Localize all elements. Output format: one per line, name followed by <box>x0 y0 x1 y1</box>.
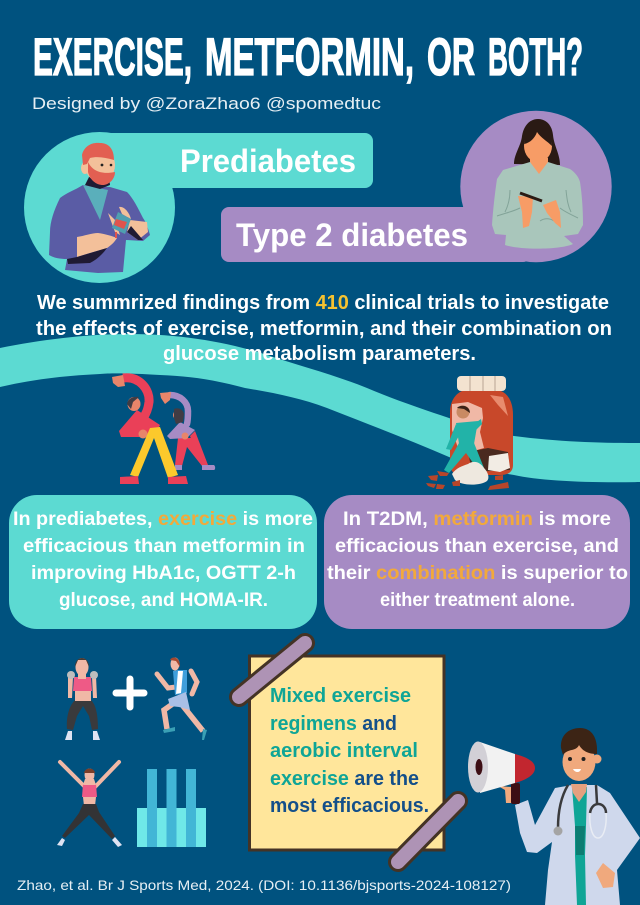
sticky note text: aerobic interval <box>270 740 418 762</box>
title: OR <box>427 28 475 87</box>
credit line: Designed by @ZoraZhao6 @spomedtuc <box>32 94 382 113</box>
panel: prediabetes finding: improving HbA1c, OGTT 2-h <box>31 562 296 584</box>
icon: interval training bars <box>137 769 206 847</box>
intro paragraph <box>36 292 612 365</box>
panel: T2DM finding: efficacious than exercise, and <box>335 535 619 557</box>
panel: T2DM finding: In T2DM, metformin is more <box>343 508 611 530</box>
title: METFORMIN, <box>205 28 414 87</box>
panel: prediabetes finding <box>9 495 317 629</box>
panel: prediabetes finding: In prediabetes, exercise is more <box>13 508 313 530</box>
icon: two people stretching <box>112 375 215 484</box>
intro paragraph: We summrized findings from 410 clinical trials to investigate <box>37 292 609 314</box>
decorative wave band <box>0 334 640 482</box>
panel: prediabetes badge <box>24 132 373 283</box>
icon: woman lifting dumbbells <box>65 658 100 740</box>
label: type 2 diabetes: Type 2 diabetes <box>236 217 468 253</box>
intro paragraph: the effects of exercise, metformin, and their combination on <box>36 318 612 340</box>
icon: man escaping metformin jar <box>426 376 513 490</box>
sticky note text: regimens and <box>270 713 397 735</box>
tape: bottom right <box>398 801 458 862</box>
panel: T2DM finding <box>324 495 630 629</box>
icon: plus sign <box>116 679 144 707</box>
panel: T2DM finding: their combination is superior to <box>327 562 628 584</box>
sticky note text <box>270 685 429 817</box>
icon: man testing blood glucose <box>49 143 150 273</box>
icon: doctor with megaphone <box>468 728 640 905</box>
panel: prediabetes finding: efficacious than metformin in <box>23 535 305 557</box>
panel: T2DM finding: either treatment alone. <box>380 589 575 611</box>
panel: type 2 diabetes badge <box>221 111 612 262</box>
title: EXERCISE, <box>33 28 192 87</box>
sticky note text: Mixed exercise <box>270 685 411 707</box>
panel: prediabetes finding: glucose, and HOMA-IR. <box>59 589 268 611</box>
label: prediabetes: Prediabetes <box>180 143 356 179</box>
icon: runner <box>157 658 207 740</box>
intro paragraph: glucose metabolism parameters. <box>163 343 476 365</box>
citation: Zhao, et al. Br J Sports Med, 2024. (DOI: 10.1136/bjsports-2024-108127) <box>17 877 511 893</box>
panel: sticky note <box>239 643 458 862</box>
title <box>33 28 583 87</box>
icon: woman in star jump <box>57 762 122 847</box>
sticky note text: exercise are the <box>270 768 419 790</box>
tape: top left <box>239 643 305 697</box>
sticky note text: most efficacious. <box>270 795 429 817</box>
icon: woman using insulin pen <box>492 119 583 249</box>
